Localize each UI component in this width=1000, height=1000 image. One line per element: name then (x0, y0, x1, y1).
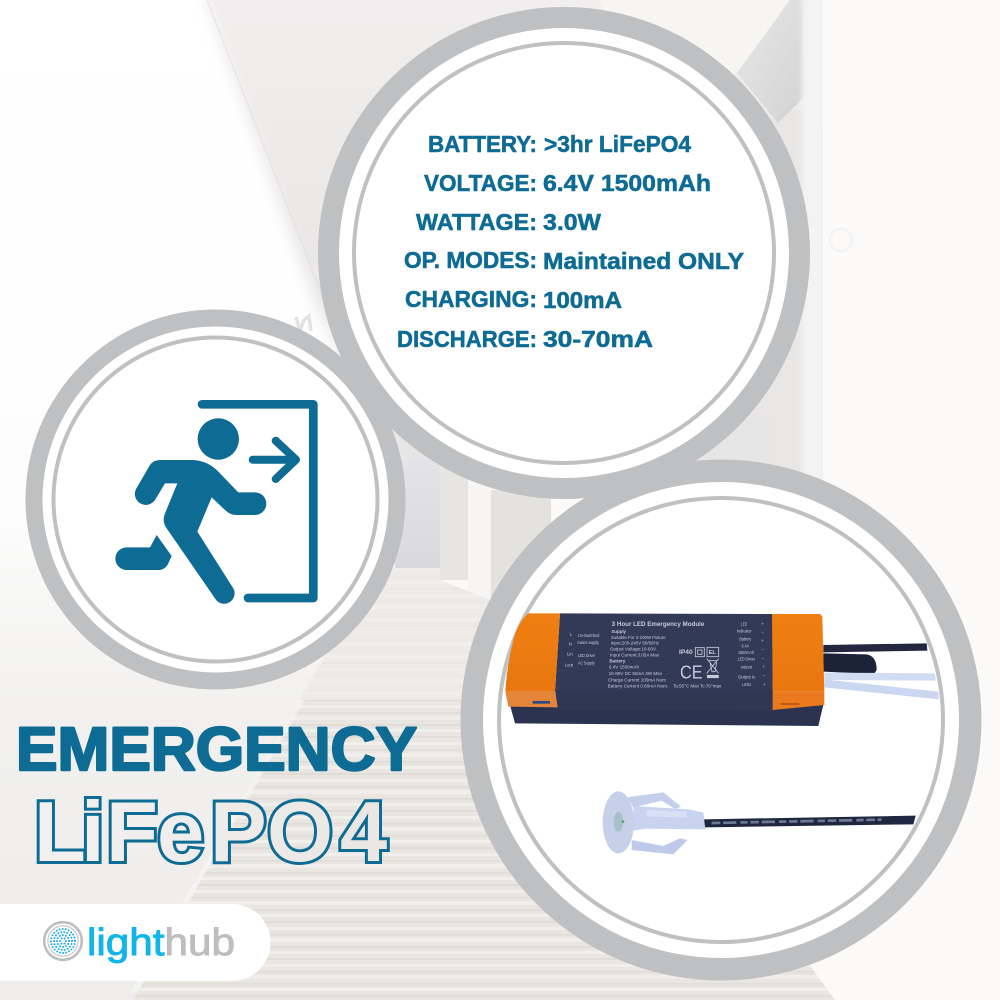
specification labels and values: BATTERY: (428, 131, 537, 157)
module label text: Lin (567, 652, 573, 657)
module label text: Indicator (737, 629, 752, 634)
module label text: Battery (609, 659, 626, 664)
specification labels and values: WATTAGE: (416, 209, 537, 235)
module label text: Ta:55°C Max Tc:70°max (673, 684, 722, 689)
emergency module product (505, 613, 939, 726)
module label text: mains supply (577, 640, 600, 645)
module label text: IP40 (679, 649, 693, 656)
module label text: + (762, 664, 765, 669)
specification labels and values: CHARGING: (405, 286, 537, 312)
module label text: N (569, 641, 572, 646)
icon: running person through exit door (115, 404, 313, 604)
specification labels and values: DISCHARGE: (397, 326, 537, 352)
specification labels and values: 6.4V 1500mAh (543, 170, 711, 196)
module label text: LEDs (742, 682, 751, 687)
module label text: + (761, 621, 764, 626)
module label text: 3 Hour LED Emergency Module (612, 621, 705, 628)
specification labels and values: VOLTAGE: (424, 170, 537, 196)
module label text: − (761, 647, 764, 652)
panel: exit icon circle (26, 310, 406, 690)
module label text: LED (741, 622, 747, 627)
module label text: 10-80V DC 55mA 3W Max (609, 671, 663, 676)
module label text: 6.4V (742, 644, 749, 649)
subtitle: LiFePO4 outlined: LiFePO4 (34, 785, 387, 880)
module label text: Output Voltage:10-60V (610, 647, 656, 652)
module label text: Un-Switched (578, 633, 600, 638)
decor: plant sprig (296, 316, 311, 331)
module label text: 6.4V 1500mAh (609, 665, 640, 670)
logo: lighthub pill (0, 904, 270, 981)
specification labels and values: 100mA (543, 287, 622, 313)
module label text: LED Driver (738, 657, 755, 662)
module label text: − (761, 630, 764, 635)
module label text: Battery (739, 637, 752, 642)
wordmark: lighthub (87, 922, 235, 964)
module label text: CE (680, 662, 703, 683)
icon: lighthub logo mark (44, 922, 82, 960)
module label text: + (761, 638, 764, 643)
module label text: Lout (565, 662, 574, 667)
module label text: + (763, 682, 766, 687)
specification labels and values (397, 131, 744, 352)
LED indicator sensor (603, 791, 916, 854)
module label text: output (741, 664, 753, 669)
module label text: Supply (611, 629, 627, 634)
module label text: − (761, 655, 764, 660)
module label text: Suitable For 3-100W Fixture (611, 635, 666, 640)
specification labels and values: >3hr LiFePO4 (544, 131, 691, 157)
panel: battery specifications circle (318, 7, 810, 499)
title: EMERGENCY: EMERGENCY (16, 715, 417, 784)
specification labels and values: Maintained ONLY (543, 248, 744, 274)
module label text (565, 621, 766, 689)
module label text: AC Supply (578, 660, 595, 665)
module label text: EL (709, 650, 716, 656)
module label text: Battery Current 0.60mA Nom. (608, 684, 668, 689)
label symbols (695, 647, 719, 678)
module label text: Input:200-240V 50/60Hz (611, 641, 659, 646)
specification labels and values: 3.0W (543, 209, 601, 235)
module label text: Output to (738, 675, 756, 680)
wires (823, 643, 939, 699)
decor: wall fitting (830, 229, 852, 251)
module label text: Charge Current 100mA Nom (608, 677, 666, 682)
module label text: L (570, 632, 573, 637)
specification labels and values: OP. MODES: (404, 247, 537, 273)
module label text: − (762, 673, 765, 678)
module label text: 1500mAh (738, 650, 755, 655)
specification labels and values: 30-70mA (543, 326, 653, 352)
panel: product photo circle (460, 460, 982, 980)
module label text: LED Driver (578, 653, 596, 658)
module label text: Input Current:3.05A Max (610, 653, 660, 658)
